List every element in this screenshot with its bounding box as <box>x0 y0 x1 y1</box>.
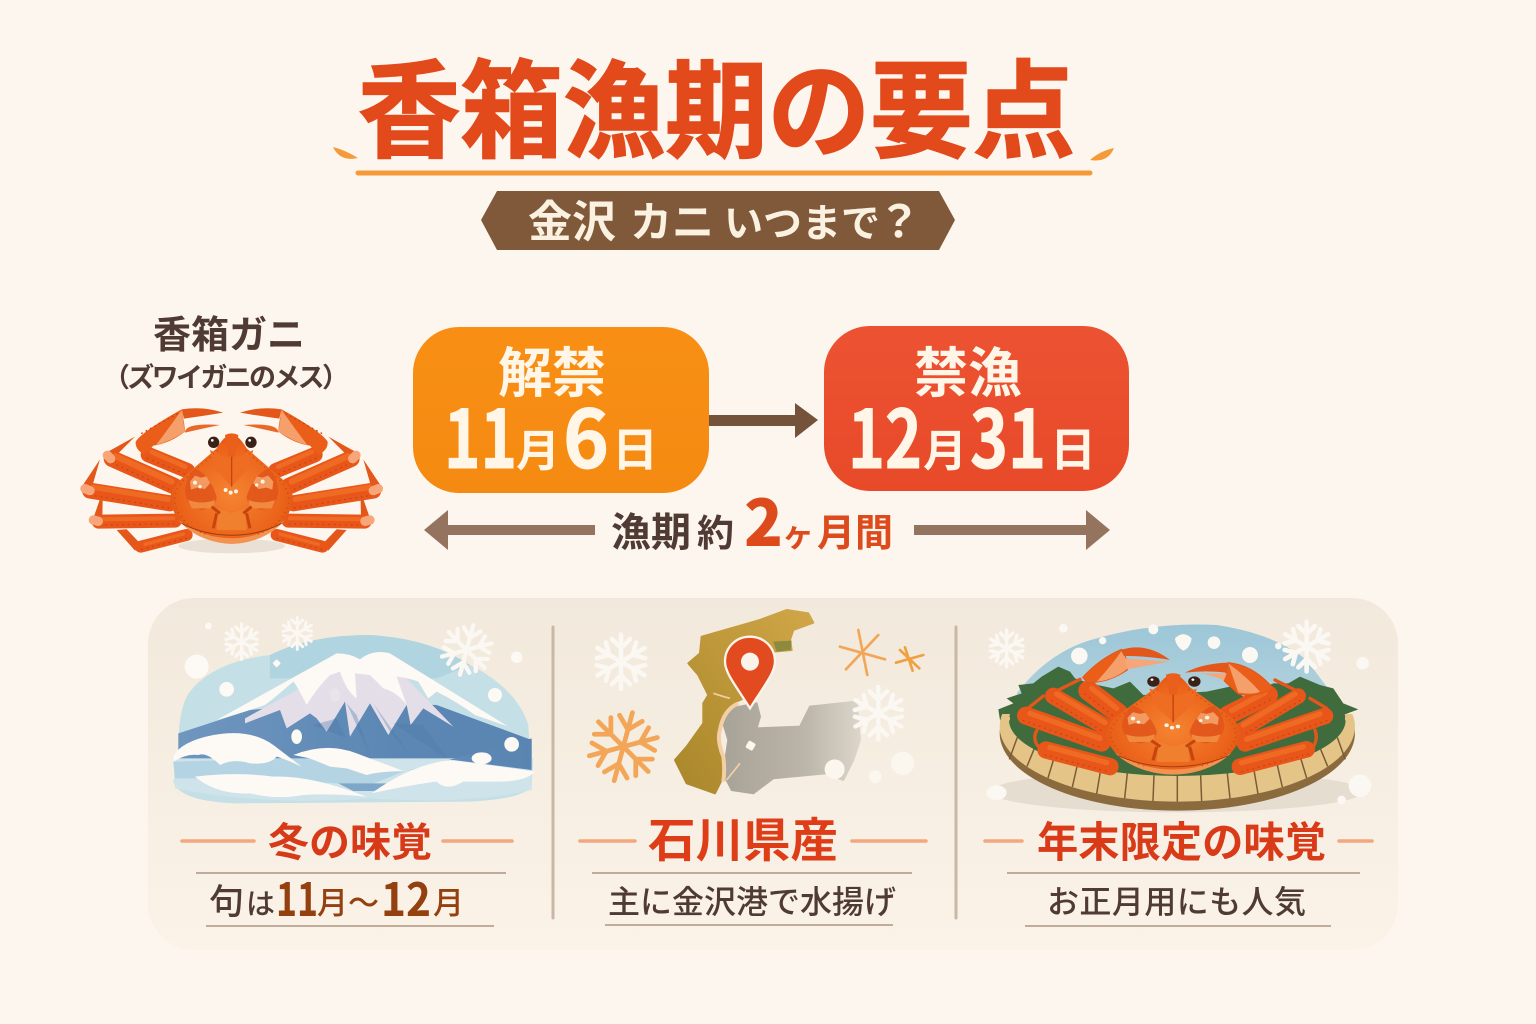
card heading: Ishikawa origin: 石川県産 <box>648 802 838 871</box>
arrow: start to end <box>709 403 818 438</box>
card text: peak season: 月 <box>433 878 464 923</box>
card text: peak season <box>196 864 506 930</box>
start date box: 日 <box>612 414 658 480</box>
subtitle banner: いつまで <box>724 193 880 249</box>
card text: peak season: 12 <box>381 864 431 930</box>
crab legs and claws <box>1023 647 1327 772</box>
start date box <box>413 327 709 493</box>
panel: three features <box>148 598 1398 950</box>
season span arrow and label: 2 <box>744 473 783 565</box>
card text: peak season: 句 <box>209 874 244 925</box>
subtitle banner: ？ <box>877 186 921 250</box>
season span arrow and label: 月間 <box>817 502 893 557</box>
start date box: 解禁 <box>498 329 606 408</box>
start date box: 6 <box>563 376 609 492</box>
end date box: 日 <box>1050 414 1096 480</box>
end date box: 禁漁 <box>914 329 1022 408</box>
card text: new year popular: お正月用にも人気 <box>1047 877 1306 923</box>
crab label <box>103 304 349 395</box>
card text: peak season: 11 <box>276 864 318 930</box>
season span arrow and label <box>424 473 1110 565</box>
icon: Ishikawa map with pin <box>579 610 923 793</box>
card text: new year popular <box>1007 873 1360 926</box>
subtitle banner <box>481 186 955 250</box>
end date box <box>824 326 1129 492</box>
season span arrow and label: 漁期 <box>611 500 691 558</box>
title: 香箱漁期の要点 <box>358 26 1075 180</box>
crab label: 香箱ガニ <box>153 304 305 359</box>
season span arrow and label: ヶ <box>782 510 814 556</box>
card text: peak season: 月 <box>317 878 348 923</box>
card heading: year-end taste: 年末限定の味覚 <box>1037 809 1326 870</box>
end date box: 月 <box>923 415 967 479</box>
icon: snow crab <box>83 408 381 553</box>
end date box: 12 <box>848 376 922 492</box>
end date box: 31 <box>970 376 1046 492</box>
crab label: （ズワイガニのメス） <box>103 356 349 395</box>
start date box: 11 <box>444 376 517 492</box>
subtitle banner: 金沢 <box>528 186 616 250</box>
card text: peak season: は <box>246 881 275 923</box>
card text: landed at Kanazawa port: 主に金沢港で水揚げ <box>608 877 896 923</box>
season span arrow and label: 約 <box>697 503 734 557</box>
card heading: winter taste: 冬の味覚 <box>268 810 432 868</box>
subtitle banner: カニ <box>630 189 714 250</box>
icon: snowy mountain <box>173 617 535 803</box>
icon: crab in basket <box>987 622 1371 812</box>
card text: peak season: ～ <box>348 878 379 923</box>
start date box: 月 <box>516 415 560 479</box>
